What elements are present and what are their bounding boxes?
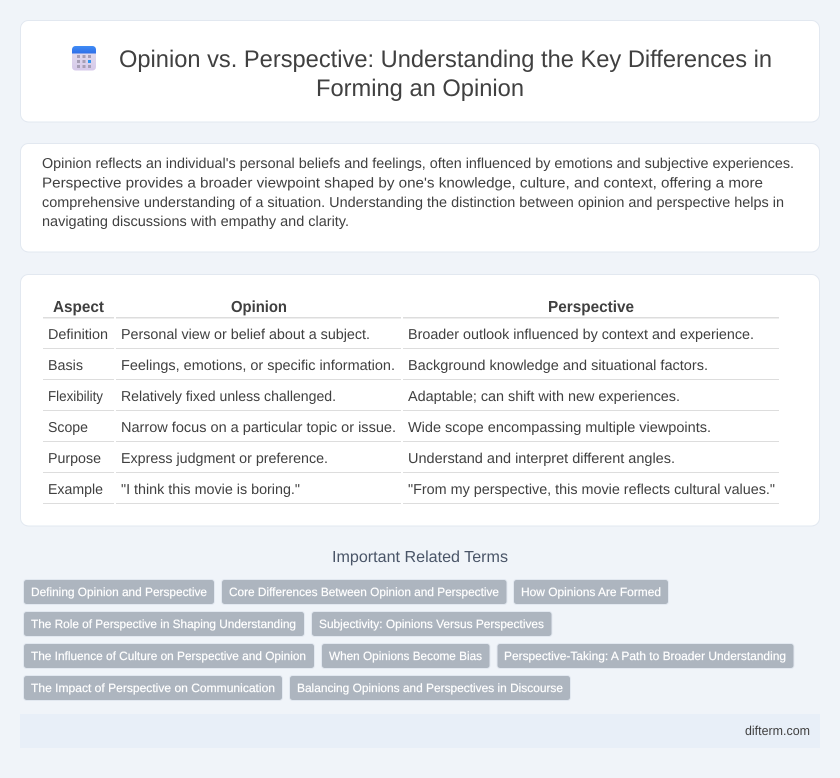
table rows: Purpose	[48, 451, 101, 467]
related term tags: Core Differences Between Opinion and Perspective	[229, 585, 499, 599]
related term tags: The Role of Perspective in Shaping Understanding	[31, 617, 296, 631]
table rows: Example	[48, 482, 103, 498]
table rows: Relatively fixed unless challenged.	[121, 389, 336, 405]
related term tags: Subjectivity: Opinions Versus Perspectives	[319, 617, 544, 631]
text block: description: Perspective provides a broader viewpoint shaped by one's knowledge, culture, and context, offering a more	[42, 176, 763, 192]
table rows: Definition	[48, 327, 108, 343]
table rows: Narrow focus on a particular topic or issue.	[121, 420, 396, 436]
panel: comparison table	[20, 274, 820, 526]
table rows: Wide scope encompassing multiple viewpoints.	[408, 420, 711, 436]
title: Forming an Opinion	[316, 75, 524, 102]
table rows: Express judgment or preference.	[121, 451, 328, 467]
text block: description	[42, 156, 794, 230]
table header: Aspect	[53, 299, 105, 316]
related term tags: How Opinions Are Formed	[521, 585, 661, 599]
panel: header	[20, 20, 820, 122]
related term tags: Balancing Opinions and Perspectives in Discourse	[297, 681, 563, 695]
table rows: Basis	[48, 358, 83, 374]
icon: calendar	[72, 46, 96, 70]
table rows	[48, 327, 775, 498]
table rows: "From my perspective, this movie reflects cultural values."	[408, 482, 775, 498]
table header: Opinion	[231, 299, 287, 316]
table rows: Personal view or belief about a subject.	[121, 327, 370, 343]
text block: description: comprehensive understanding of a situation. Understanding the distinction between opinion and perspective helps in	[42, 195, 784, 211]
table rows: "I think this movie is boring."	[121, 482, 300, 498]
related term tags: Perspective-Taking: A Path to Broader Understanding	[504, 649, 786, 663]
text block: description: Opinion reflects an individual's personal beliefs and feelings, often influenced by emotions and subjective experiences.	[42, 156, 794, 172]
table rows: Flexibility	[48, 389, 104, 405]
table rows: Adaptable; can shift with new experiences.	[408, 389, 680, 405]
text block: description: navigating discussions with empathy and clarity.	[42, 214, 349, 230]
title: Opinion vs. Perspective: Understanding the Key Differences in	[119, 46, 772, 73]
related term tags: When Opinions Become Bias	[329, 649, 482, 663]
footer	[20, 714, 820, 748]
table header: Perspective	[548, 299, 634, 316]
panel: description	[20, 144, 820, 252]
title	[119, 46, 772, 102]
footer credit: difterm.com	[745, 723, 810, 738]
table rows: Background knowledge and situational factors.	[408, 358, 708, 374]
related term tags: The Influence of Culture on Perspective and Opinion	[31, 649, 306, 663]
table rows: Broader outlook influenced by context and experience.	[408, 327, 754, 343]
related term tags	[24, 580, 794, 700]
related term tags: Defining Opinion and Perspective	[31, 585, 207, 599]
table header	[53, 299, 634, 316]
table rows: Feelings, emotions, or specific information.	[121, 358, 395, 374]
related term tags: The Impact of Perspective on Communication	[31, 681, 275, 695]
table rows: Understand and interpret different angles.	[408, 451, 675, 467]
heading: related terms: Important Related Terms	[332, 549, 508, 566]
table rows: Scope	[48, 420, 88, 436]
